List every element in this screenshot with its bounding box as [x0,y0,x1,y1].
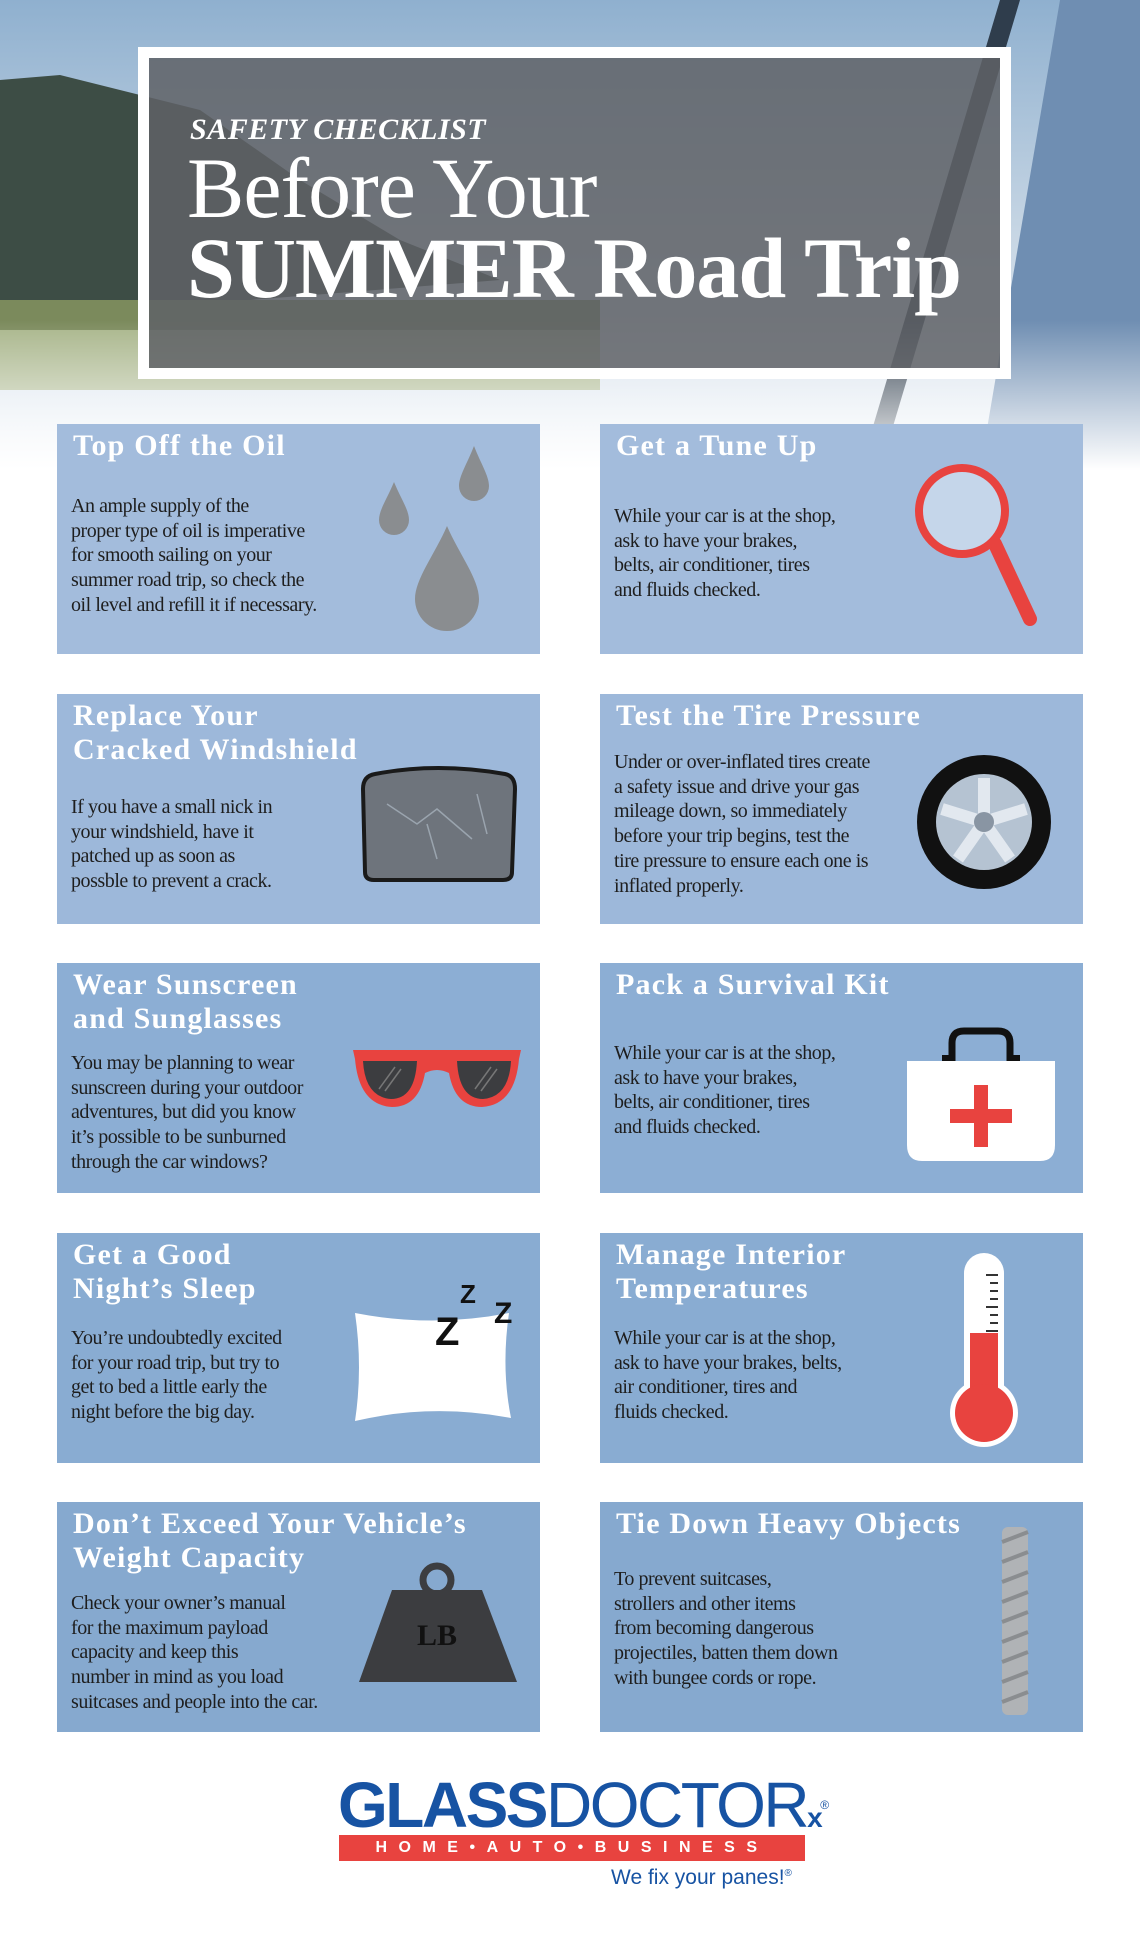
panel: survival kit [600,963,1083,1193]
panel: get a tune up: ask to have your brakes, [614,530,797,552]
panel: weight capacity [57,1502,540,1732]
panel: top off the oil: for smooth sailing on your [71,544,272,566]
panel: sunscreen: it’s possible to be sunburned [71,1126,286,1148]
icon: windshield [361,766,517,882]
icon: tire [917,755,1051,889]
icon: pillow with zzz [355,1279,512,1421]
panel: tie down: projectiles, batten them down [614,1642,838,1664]
panel: replace windshield: possble to prevent a crack. [71,870,272,892]
panel: sunscreen: sunscreen during your outdoor [71,1077,303,1099]
panel: interior temperatures: While your car is at the shop, [614,1327,835,1349]
panel: tire pressure: Test the Tire Pressure [616,699,921,732]
title: before your summer road trip: SUMMER Road Trip [187,220,961,316]
panel: weight capacity: Weight Capacity [73,1541,305,1574]
panel: tie down: with bungee cords or rope. [614,1667,816,1689]
logo tagline bar: HOME•AUTO•BUSINESS [375,1839,769,1856]
subtitle: safety checklist: SAFETY CHECKLIST [190,113,486,146]
panel: replace windshield: patched up as soon as [71,845,235,867]
panel: get a tune up: and fluids checked. [614,579,760,601]
panel: tire pressure: a safety issue and drive your gas [614,776,859,798]
panel: replace windshield: your windshield, have it [71,821,254,843]
panel: weight capacity: for the maximum payload [71,1617,268,1639]
icon: pillow with zzz: Z [460,1279,476,1309]
panel: survival kit: and fluids checked. [614,1116,760,1138]
logo slogan: We fix your panes!® [611,1866,792,1889]
panel: weight capacity: Don’t Exceed Your Vehicle’s [73,1507,467,1540]
panel: interior temperatures: Manage Interior [616,1238,846,1271]
panel: tie down: from becoming dangerous [614,1617,814,1639]
panel: replace windshield: Cracked Windshield [73,733,358,766]
panel: interior temperatures: fluids checked. [614,1401,728,1423]
panel: good sleep: Night’s Sleep [73,1272,257,1305]
panel: survival kit: Pack a Survival Kit [616,968,890,1001]
panel: interior temperatures: air conditioner, tires and [614,1376,797,1398]
panel: good sleep: for your road trip, but try to [71,1352,279,1374]
icon: weight [359,1562,517,1682]
logo: glass doctor: GLASSDOCTORx® [338,1769,827,1841]
panel: interior temperatures: ask to have your brakes, belts, [614,1352,842,1374]
panel: top off the oil: oil level and refill it if necessary. [71,594,317,616]
panel: sunscreen: Wear Sunscreen [73,968,298,1001]
panel: weight capacity: number in mind as you load [71,1666,283,1688]
panel: tire pressure [600,694,1083,924]
panel: get a tune up: While your car is at the shop, [614,505,835,527]
panel: sunscreen: adventures, but did you know [71,1101,296,1123]
icon: thermometer [950,1253,1018,1447]
panel: tie down [600,1502,1083,1732]
icon: first aid kit [907,1028,1055,1161]
icon: weight: LB [417,1619,457,1652]
panel: interior temperatures: Temperatures [616,1272,809,1305]
panel: replace windshield: If you have a small nick in [71,796,272,818]
panel: weight capacity: Check your owner’s manual [71,1592,285,1614]
logo: glass doctor [338,1769,829,1889]
panel: sunscreen: through the car windows? [71,1151,267,1173]
icon: pillow with zzz: Z [494,1297,512,1330]
panel: tie down: To prevent suitcases, [614,1568,771,1590]
panel: weight capacity: suitcases and people into the car. [71,1691,318,1713]
panel: tire pressure: Under or over-inflated tires create [614,751,870,773]
panel: tie down: strollers and other items [614,1593,796,1615]
panel: good sleep [57,1233,540,1463]
icon: oil drops [379,446,489,631]
icon: pillow with zzz: Z [435,1310,459,1354]
panel: top off the oil: An ample supply of the [71,495,249,517]
panel: get a tune up: Get a Tune Up [616,429,818,462]
icon: sunglasses [353,1050,521,1107]
panel: tire pressure: inflated properly. [614,875,743,897]
panel: top off the oil: summer road trip, so check the [71,569,304,591]
panel: top off the oil: proper type of oil is imperative [71,520,305,542]
logo tagline bar [339,1835,805,1861]
panel: survival kit: ask to have your brakes, [614,1067,797,1089]
panel: survival kit: belts, air conditioner, tires [614,1091,810,1113]
panel: tire pressure: before your trip begins, test the [614,825,849,847]
panel: good sleep: Get a Good [73,1238,232,1271]
panel: tie down: Tie Down Heavy Objects [616,1507,961,1540]
panel: good sleep: You’re undoubtedly excited [71,1327,282,1349]
panel: sunscreen: You may be planning to wear [71,1052,294,1074]
panel: top off the oil [57,424,540,654]
background photo [0,0,1140,462]
panel: weight capacity: capacity and keep this [71,1641,238,1663]
title frame [138,47,1011,379]
panel: tire pressure: mileage down, so immediately [614,800,847,822]
panel: get a tune up [600,424,1083,654]
panel: good sleep: night before the big day. [71,1401,255,1423]
panel: interior temperatures [600,1233,1083,1463]
title: before your summer road trip [187,140,961,316]
panel: good sleep: get to bed a little early the [71,1376,267,1398]
panel: top off the oil: Top Off the Oil [73,429,286,462]
panel: replace windshield: Replace Your [73,699,259,732]
panel: replace windshield [57,694,540,924]
panel: survival kit: While your car is at the shop, [614,1042,835,1064]
panel: sunscreen [57,963,540,1193]
title: before your summer road trip: Before Your [187,140,596,236]
panel: tire pressure: tire pressure to ensure each one is [614,850,868,872]
icon: magnifier [915,464,1037,626]
panel: sunscreen: and Sunglasses [73,1002,282,1035]
panel: get a tune up: belts, air conditioner, tires [614,554,810,576]
icon: rope [1001,1527,1029,1715]
